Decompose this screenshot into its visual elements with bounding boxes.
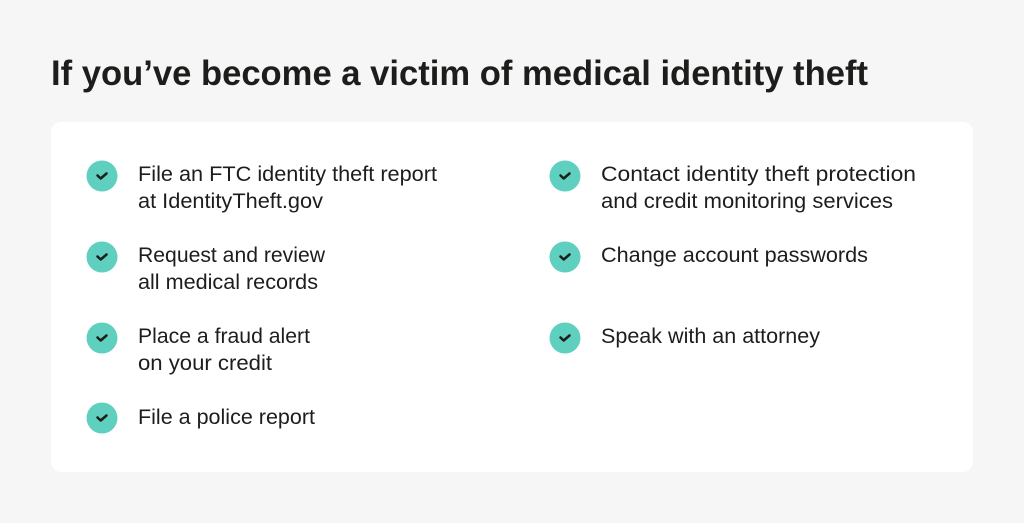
item: fraud alert: on your credit bbox=[138, 352, 272, 375]
panel: checklist bbox=[51, 122, 973, 472]
item: request medical records: all medical records bbox=[138, 271, 318, 294]
title: If you’ve become a victim of medical identity theft bbox=[51, 54, 868, 93]
item: file FTC report bbox=[86, 160, 437, 213]
item: file FTC report: at IdentityTheft.gov bbox=[138, 190, 324, 213]
item: attorney bbox=[550, 322, 821, 354]
item: request medical records bbox=[86, 242, 326, 294]
item: attorney: Speak with an attorney bbox=[601, 325, 821, 348]
item: request medical records: Request and review bbox=[138, 244, 326, 267]
item: police report: File a police report bbox=[138, 406, 315, 429]
item: police report bbox=[86, 402, 315, 434]
item: fraud alert bbox=[86, 322, 310, 375]
item: file FTC report: File an FTC identity theft report bbox=[138, 163, 437, 186]
item: change passwords: Change account passwords bbox=[601, 244, 868, 267]
item: protection services bbox=[550, 160, 916, 213]
item: change passwords bbox=[550, 242, 868, 272]
item: protection services: and credit monitoring services bbox=[601, 190, 893, 213]
item: protection services: Contact identity theft protection bbox=[601, 163, 916, 186]
item: fraud alert: Place a fraud alert bbox=[138, 325, 310, 348]
